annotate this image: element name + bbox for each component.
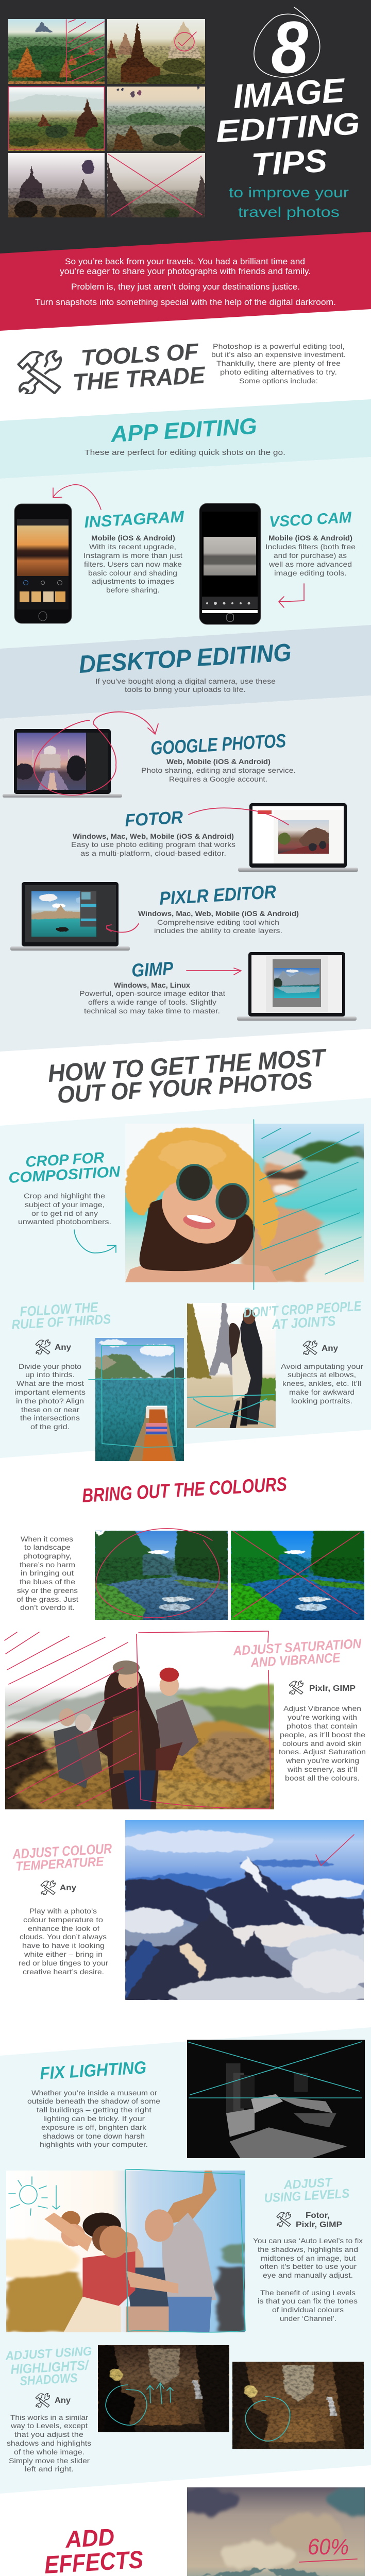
title line: IMAGE: IMAGE (232, 71, 346, 115)
text: way to Levels, except (10, 2421, 88, 2430)
text (14, 1362, 86, 1431)
text: fotor (71, 832, 235, 857)
text: pixlr editor: includes the ability to create layers. (154, 926, 282, 935)
text: tones. Adjust Saturation (279, 1748, 366, 1756)
heading: USING LEVELS (264, 2186, 350, 2206)
text: boost all the colours. (285, 1774, 360, 1782)
text: the shadows, highlights and (258, 2245, 358, 2253)
text: shadows or tone down harsh (43, 2132, 145, 2140)
photo: lake and boat (95, 1338, 184, 1461)
annotation: red border (8, 87, 104, 149)
text: left and right. (25, 2465, 74, 2473)
panel: highlights and shadows (5, 2344, 364, 2473)
heading: ADJUST USING (5, 2344, 92, 2363)
text (27, 2089, 160, 2148)
background band: app editing body (0, 457, 371, 649)
text: The benefit of using Levels (260, 2289, 356, 2297)
heading: APP EDITING (110, 414, 258, 447)
laptop mockup (237, 952, 357, 1021)
background band: intro red (0, 232, 371, 331)
text: red or blue tinges to your (19, 1959, 108, 1967)
heading (5, 2344, 92, 2388)
text: midtones of an image, but (261, 2254, 356, 2262)
text: the blues of the (20, 1578, 75, 1586)
text: with scenery, as it’ll (287, 1765, 357, 1773)
text: gimp (79, 981, 225, 1015)
phone mockup (14, 504, 72, 623)
text: instagram: adjustments to images (92, 577, 174, 585)
annotation: teal circle and arrows (106, 2383, 173, 2425)
text (279, 1704, 366, 1782)
text: gimp: Powerful, open-source image editor that (79, 989, 225, 997)
text: exposure is off, brighten dark (41, 2123, 147, 2131)
background band: app editing heading (0, 399, 371, 479)
text: instagram: Mobile (iOS & Android) (91, 534, 175, 542)
text: lighting can be tricky. If your (43, 2114, 145, 2123)
text: Whether you’re inside a museum or (31, 2089, 157, 2097)
text: in bringing out (21, 1569, 74, 1577)
heading: COMPOSITION (8, 1163, 121, 1187)
text: gimp: Windows, Mac, Linux (114, 981, 190, 989)
photo: cathedral brightened (232, 2362, 364, 2449)
text (18, 1192, 111, 1226)
heading (11, 1299, 112, 1332)
heading: FOLLOW THE (20, 1299, 99, 1319)
annotation: red cross (108, 154, 202, 215)
photo: couple kissing at eiffel tower (187, 1303, 276, 1428)
annotation: 60 percent: 60% (308, 2534, 349, 2560)
heading: instagram: INSTAGRAM (83, 507, 185, 531)
heading: RULE OF THIRDS (11, 1311, 112, 1332)
arrow: red straight (187, 968, 241, 975)
subheading (95, 677, 276, 693)
text: colour temperature to (23, 1916, 103, 1924)
annotation: red hatching (5, 1632, 136, 1806)
arrow: red curve to photo (189, 808, 289, 825)
subtitle: travel photos (238, 204, 340, 220)
heading: google photos: GOOGLE PHOTOS (150, 730, 286, 759)
text (7, 2413, 91, 2473)
heading: AT JOINTS (271, 1313, 336, 1332)
heading: SHADOWS (20, 2371, 78, 2388)
subheading: These are perfect for editing quick shots on the go. (85, 448, 285, 457)
annotation: teal cross and line (189, 2042, 362, 2098)
text: of individual colours (272, 2306, 344, 2314)
text: is that you can fix the tones (258, 2297, 358, 2305)
photo: snowy mountain above clouds (125, 1820, 364, 2000)
text: instagram: filters. Users can now make (84, 560, 182, 568)
arrow: red elbow (279, 584, 304, 607)
text: Simply move the slider (9, 2456, 90, 2465)
background: dark header (0, 0, 371, 258)
text: in the photo? Align (16, 1397, 84, 1405)
heading: TEMPERATURE (15, 1854, 105, 1874)
text: instagram: With its recent upgrade, (89, 543, 176, 551)
icon: tools (36, 1340, 50, 1354)
intro text: So you’re back from your travels. You had a brilliant time and (65, 257, 305, 266)
photo: friends selfie at sunset (6, 2171, 245, 2332)
photo: hiker on rock in vintage tones (187, 2487, 365, 2576)
heading: AND VIBRANCE (250, 1650, 341, 1670)
text: vsco cam: image editing tools. (274, 569, 347, 577)
laptop mockup (238, 803, 358, 872)
laptop mockup (3, 729, 122, 798)
annotation: teal circle (245, 2397, 290, 2441)
text: instagram: before sharing. (106, 586, 160, 594)
panel: crop for composition (8, 1120, 364, 1290)
label: fotor pixlr gimp (296, 2211, 342, 2229)
text: photography, (23, 1552, 72, 1560)
text: Divide your photo (19, 1362, 81, 1370)
photo: temple with tick (107, 19, 205, 84)
label: any: Any (55, 1343, 71, 1352)
text: under ‘Channel’. (280, 2314, 336, 2323)
text: shadows and highlights (7, 2439, 91, 2447)
text: of the grid. (30, 1422, 70, 1431)
annotation: red circle arrow (34, 712, 158, 795)
text: instagram (83, 534, 182, 594)
text: photos that contain (286, 1722, 358, 1730)
text: You can use ‘Auto Level’s to fix (253, 2236, 363, 2245)
heading: CROP FOR (25, 1149, 105, 1171)
text: of the grass. Just (16, 1595, 78, 1603)
title line: TIPS: TIPS (250, 143, 328, 183)
arrow: teal curved (74, 1230, 116, 1253)
text (281, 1362, 363, 1405)
subheading: tools to bring your uploads to life. (125, 685, 246, 693)
label: any: Any (55, 2396, 71, 2405)
title block (215, 7, 361, 220)
label: any: Any (60, 1884, 76, 1892)
annotation: teal crop frame (125, 2170, 245, 2332)
photo: hazy temples with balloon (8, 153, 105, 217)
heading: fotor: FOTOR (124, 808, 184, 831)
text: vsco cam: Mobile (iOS & Android) (268, 534, 352, 542)
icon: tools (289, 1681, 303, 1694)
photo: family walking in dunes (5, 1660, 274, 1809)
text: photoshop alternatives: Some options include: (239, 377, 318, 385)
text: have to have it looking (22, 1941, 105, 1950)
laptop mockup (10, 882, 130, 951)
heading: DESKTOP EDITING (78, 639, 292, 679)
label: any: Any (322, 1344, 338, 1353)
arrow: curved red (53, 485, 101, 510)
annotation: teal thirds grid (89, 1345, 185, 1447)
text: Adjust Vibrance when (283, 1704, 361, 1713)
text: fotor: Easy to use photo editing program that works (71, 840, 235, 849)
label: pixlr gimp: Pixlr, GIMP (309, 1684, 356, 1693)
subtitle (229, 184, 349, 220)
text: these on or near (21, 1405, 79, 1414)
text: colours and avoid skin (282, 1739, 362, 1748)
label: fotor pixlr gimp: Pixlr, GIMP (296, 2221, 342, 2229)
text: don’t overdo it. (20, 1603, 75, 1612)
heading: ADJUST (283, 2175, 333, 2192)
heading: add effects (44, 2523, 144, 2576)
text: photoshop alternatives: but it’s also an expensive investment. (211, 350, 346, 359)
annotation: teal crop hatching (254, 1120, 361, 1290)
text: unwanted photobombers. (18, 1217, 111, 1226)
panel: gimp (79, 952, 357, 1021)
annotation: red crop frame (137, 1631, 271, 1809)
title line: EDITING: EDITING (215, 106, 361, 149)
panel: add effects (38, 2487, 371, 2576)
text: highlights with your computer. (40, 2140, 148, 2148)
text: sky or the greens (17, 1586, 78, 1595)
text: Play with a photo’s (29, 1907, 97, 1915)
text: knees, ankles, etc. It’ll (282, 1379, 361, 1387)
text: photoshop alternatives: Photoshop is a powerful editing tool, (213, 342, 345, 350)
photo: balloons over misty plain (107, 87, 205, 151)
panel: instagram (14, 485, 185, 623)
photo: river natural (95, 1531, 228, 1620)
panel: fotor (71, 803, 358, 872)
phone mockup (199, 503, 261, 624)
text: pixlr editor: Windows, Mac, Web, Mobile (iOS & Android) (138, 909, 299, 918)
text: that you adjust the (14, 2430, 83, 2438)
annotation: teal cross (188, 1395, 274, 1426)
heading: vsco cam: VSCO CAM (269, 509, 352, 531)
main heading: how to get the most out of your photos: OUT OF YOUR PHOTOS (57, 1067, 313, 1108)
text: vsco cam: Includes filters (both free (265, 543, 356, 551)
background band: desktop editing heading (0, 625, 371, 719)
text: vsco cam: and for purchase) as (274, 551, 347, 560)
heading: bring out the colours: BRING OUT THE COLOURS (81, 1473, 288, 1507)
text: vsco cam: well as more advanced (268, 560, 352, 568)
heading (12, 1841, 112, 1874)
text: to landscape (24, 1543, 71, 1551)
text: gimp: offers a wide range of tools. Slightly (88, 998, 216, 1006)
photo: dark colonnade (187, 2040, 365, 2158)
heading: tools of the trade: TOOLS OF (80, 339, 199, 371)
app editing heading (85, 414, 285, 457)
annotation: sun and arrow (9, 2177, 60, 2215)
annotation: red hatching (66, 20, 104, 82)
main heading: how to get the most out of your photos (47, 1044, 328, 1108)
text: important elements (14, 1388, 86, 1396)
text: up into thirds. (25, 1370, 75, 1379)
text: outside beneath the shadow of some (27, 2097, 160, 2105)
background band: desktop editing body (0, 696, 371, 1052)
heading (264, 2175, 350, 2206)
arrow: red curved (107, 924, 139, 932)
text: the intersections (20, 1414, 80, 1422)
heading (232, 1636, 362, 1670)
photo: cathedral dark (98, 2345, 229, 2432)
text (253, 2236, 363, 2323)
main heading: how to get the most out of your photos: HOW TO GET THE MOST (47, 1044, 328, 1088)
panel: bring out the colours (16, 1529, 364, 1620)
photo: river oversaturated (231, 1531, 364, 1620)
text: white either – bring in (24, 1950, 103, 1958)
heading (243, 1298, 362, 1332)
text: when you’re working (285, 1756, 359, 1765)
intro text: Problem is, they just aren’t doing your destinations justice. (71, 282, 300, 292)
text: Avoid amputating your (281, 1362, 363, 1370)
panel: colour temperature (12, 1820, 371, 2009)
text: google photos: Web, Mobile (iOS & Android) (166, 757, 271, 766)
text (16, 1535, 78, 1612)
text: pixlr editor: Comprehensive editing tool which (157, 918, 279, 926)
intro text: you’re eager to share your photographs with friends and family. (60, 267, 311, 276)
text: there’s no harm (20, 1561, 75, 1569)
photo: temple with red frame (8, 87, 105, 151)
text: photoshop alternatives: Thankfully, there are plenty of free (216, 359, 341, 367)
panel: dont crop people at joints (187, 1298, 363, 1428)
text: pixlr editor (138, 909, 299, 935)
intro text (35, 257, 336, 307)
heading: HIGHLIGHTS/ (10, 2357, 90, 2377)
text: often it’s better to use your (260, 2262, 357, 2270)
text: vsco cam (265, 534, 356, 577)
photo: green temples with hatching (8, 19, 105, 84)
text: looking portraits. (291, 1397, 352, 1405)
heading: tools of the trade: THE TRADE (72, 361, 206, 396)
text: clouds. You don’t always (20, 1933, 107, 1941)
header photo grid (8, 19, 207, 220)
annotation: red circle and tick (175, 32, 196, 51)
panel: rule of thirds (11, 1299, 185, 1461)
label: fotor pixlr gimp: Fotor, (306, 2211, 330, 2220)
text: fotor: as a multi-platform, cloud-based editor. (80, 849, 226, 857)
heading: gimp: GIMP (131, 957, 174, 981)
text: google photos (141, 757, 296, 783)
annotation: red tick (316, 1835, 354, 1866)
text: eye and manually adjust. (263, 2271, 353, 2279)
heading: ADJUST COLOUR (12, 1841, 112, 1862)
panel: saturation and vibrance (0, 1631, 366, 1833)
text: you’re working with (288, 1713, 357, 1721)
heading: tools of the trade (72, 339, 206, 396)
heading: pixlr editor: PIXLR EDITOR (159, 881, 277, 909)
icon: tools (277, 2212, 291, 2227)
text: subject of your image, (25, 1200, 105, 1209)
panel: adjust using levels (0, 2170, 363, 2332)
icon: hammer and wrench (19, 351, 61, 394)
subheading: If you’ve bought along a digital camera, use these (95, 677, 276, 685)
text: tall buildings – getting the right (37, 2106, 151, 2114)
annotation: red cross (233, 1531, 360, 1617)
icon: tools (303, 1341, 317, 1355)
panel: pixlr editor (10, 881, 299, 951)
text: fotor: Windows, Mac, Web, Mobile (iOS & Android) (73, 832, 234, 840)
heading (8, 1149, 121, 1187)
text: photoshop alternatives: photo editing alternatives to try. (220, 368, 337, 376)
text: google photos: Requires a Google account. (169, 775, 267, 783)
icon: tools (36, 2394, 49, 2408)
background band: crop tips (0, 1098, 371, 1458)
intro text: Turn snapshots into something special with the help of the digital darkroom. (35, 298, 336, 307)
heading: add effects: ADD (64, 2523, 115, 2553)
text: subjects at elbows, (288, 1370, 356, 1379)
hand-drawn circle (254, 7, 320, 77)
photo: hazy temples crossed out (107, 153, 205, 217)
annotation: red circle (96, 1529, 220, 1618)
text: people, as it’ll boost the (280, 1731, 365, 1739)
numeral 8: 8 (271, 7, 308, 89)
icon: tools (41, 1881, 55, 1895)
text: google photos: Photo sharing, editing and storage service. (141, 766, 296, 774)
text: or to get rid of any (31, 1209, 98, 1217)
desktop editing heading (78, 639, 292, 693)
panel: google photos (3, 712, 296, 798)
text: gimp: technical so may take time to master. (84, 1007, 220, 1015)
panel: vsco cam (199, 503, 356, 624)
text: of the whole image. (14, 2448, 85, 2456)
text (19, 1907, 108, 1976)
text: What are the most (16, 1379, 84, 1387)
background band: lighting tips (0, 2027, 371, 2494)
panel: fix lighting (27, 2040, 365, 2158)
text: make for awkward (289, 1388, 355, 1396)
text: This works in a similar (10, 2413, 88, 2421)
photo: woman in straw hat with photobomber (125, 1124, 364, 1282)
text: instagram: basic colour and shading (88, 569, 177, 577)
text: When it comes (21, 1535, 73, 1543)
text: Crop and highlight the (24, 1192, 105, 1200)
subtitle: to improve your (229, 184, 349, 200)
heading: FIX LIGHTING (39, 2058, 147, 2083)
text: instagram: Instagram is more than just (83, 551, 182, 560)
text: creative heart’s desire. (23, 1968, 104, 1976)
text: enhance the look of (28, 1924, 99, 1933)
tools of the trade section (19, 339, 346, 396)
text: photoshop alternatives (211, 342, 346, 385)
